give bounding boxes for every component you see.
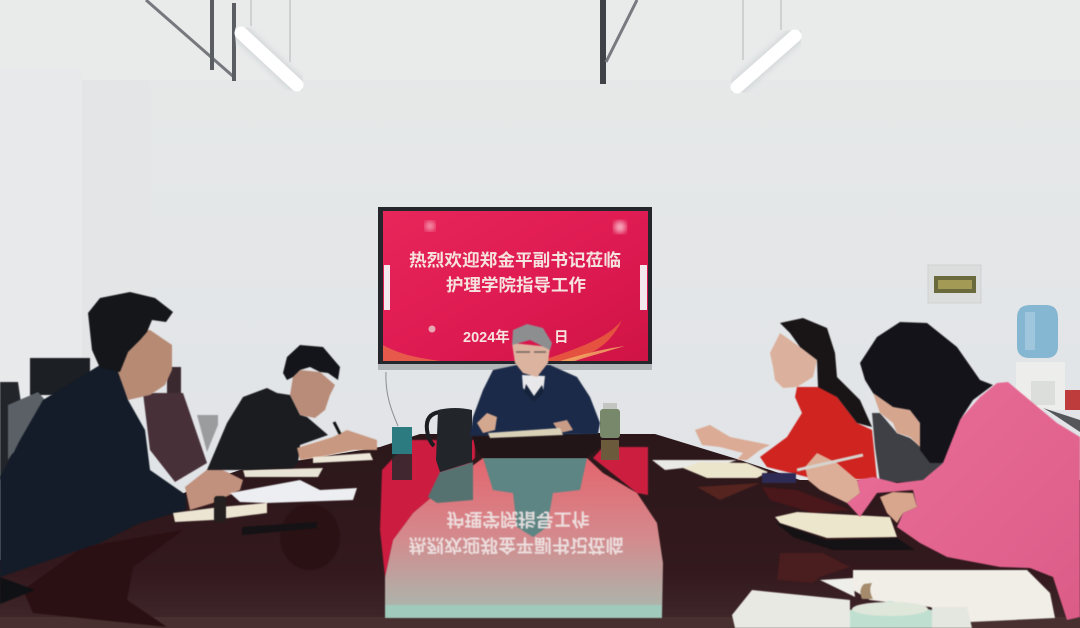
power cord [386, 372, 398, 426]
ceiling light right with brackets [603, 0, 795, 87]
tea glass jar [600, 403, 620, 460]
seated woman with short hair [207, 345, 377, 470]
open books, papers and cup at bottom right [732, 570, 1055, 628]
grey chair behind pink jacket [872, 413, 945, 482]
seated man at far left [0, 292, 243, 604]
reflected man silhouette [483, 458, 587, 537]
head reflection on table [280, 504, 340, 570]
table reflection of man at left [23, 530, 183, 627]
dark reflection band at table edge [473, 433, 600, 458]
mirrored screen subheading: 护理学院指导工作 [446, 509, 590, 530]
kettle [427, 408, 472, 472]
conference table [0, 434, 1080, 628]
teal cup [392, 427, 412, 480]
woman in pink jacket [797, 322, 1080, 620]
computer monitor and chairs at left [0, 358, 218, 482]
presiding man at centre [470, 324, 600, 438]
paperwork at left [173, 468, 357, 535]
woman in red sweater [695, 318, 877, 480]
wall panel [928, 265, 981, 303]
water dispenser and bottle [1016, 305, 1080, 432]
wall-mounted display screen [378, 207, 652, 370]
screen heading: 热烈欢迎郑金平副书记莅临 [409, 250, 621, 270]
screen date: 2024年 [463, 328, 510, 346]
reflected kettle [428, 462, 473, 503]
screen reflection on table [380, 440, 663, 618]
notebooks and phone on right side of table [652, 460, 915, 583]
screen date end: 日 [554, 330, 568, 346]
screen subheading: 护理学院指导工作 [446, 275, 586, 295]
ceiling light left with brackets [146, 0, 297, 85]
mirrored screen heading: 热烈欢迎郑金平副书记莅临 [408, 535, 624, 556]
